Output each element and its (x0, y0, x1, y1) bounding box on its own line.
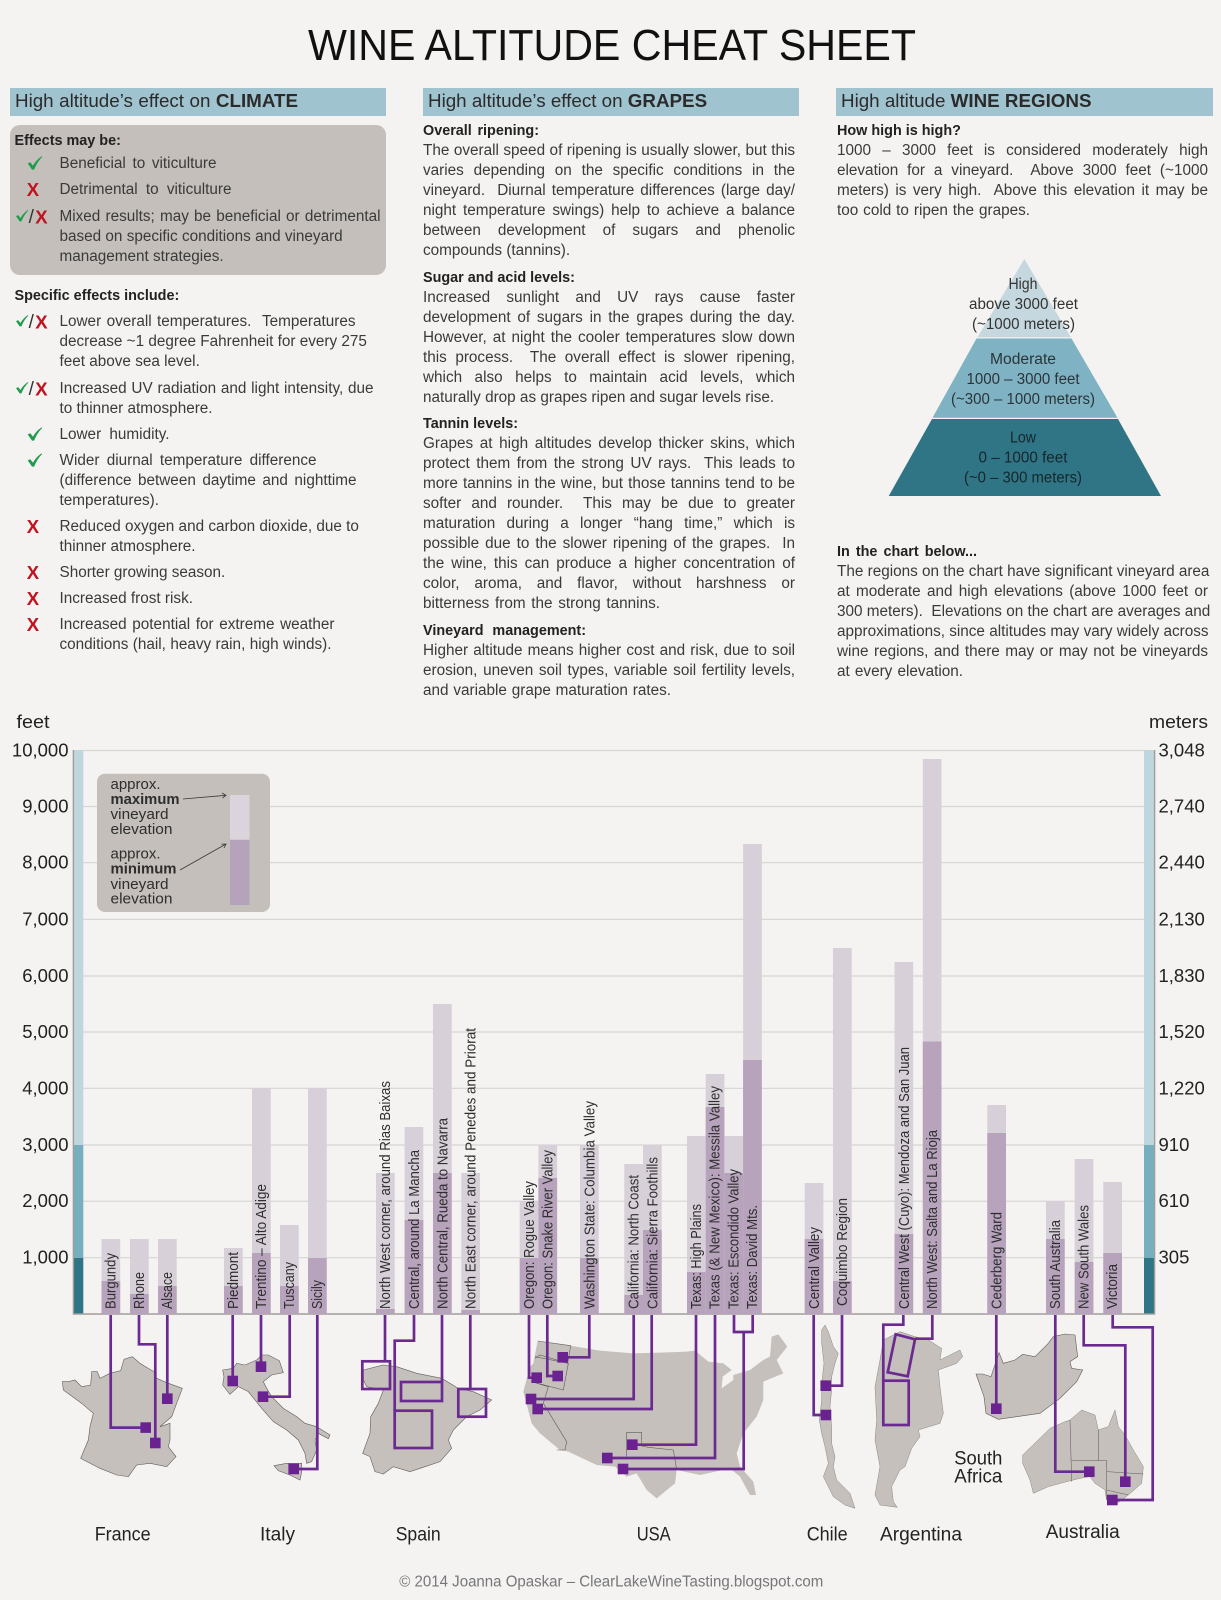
text block: overall ripening: Overall ripening: (423, 123, 539, 139)
y axis: meters: 2,740 (1158, 796, 1205, 816)
map: Argentina (875, 1332, 963, 1507)
bars: Argentina: North West: Salta and La Rioja (925, 1129, 941, 1309)
text block: sugar and acid levels (423, 270, 795, 406)
country labels: Australia (1046, 1522, 1120, 1543)
panel: climate (10, 88, 386, 653)
effect: lower humidity: Lower humidity. (60, 426, 170, 443)
y axis: feet: feet (16, 711, 50, 732)
legend: elevation (110, 892, 172, 908)
y axis: meters: 610 (1158, 1190, 1189, 1211)
map: Australia (1023, 1410, 1143, 1505)
text block: tannin levels: maturation during a longer “hang time,” which is (423, 515, 795, 532)
effect: shorter season: X (27, 562, 40, 583)
bars: Spain: Central, around La Mancha (407, 1149, 423, 1309)
map: USA (523, 1334, 787, 1498)
key: detrimental: X (27, 179, 40, 200)
connectors: Chile (814, 1315, 842, 1420)
footer credit: © 2014 Joanna Opaskar – ClearLakeWineTasting.blogspot.com (399, 1574, 823, 1591)
text block: vineyard management: Vineyard management: (423, 623, 586, 639)
pyramid tier: low: Low (1010, 430, 1037, 447)
bars: USA: Texas: High Plains (689, 1204, 705, 1309)
key: detrimental: Detrimental to viticulture (60, 181, 232, 198)
map: Spain (363, 1365, 492, 1474)
connectors: Italy (227, 1315, 317, 1474)
text block: tannin levels: softer and rounder. This may be due to greater (423, 495, 795, 512)
y axis: feet: 8,000 (22, 852, 68, 873)
effect: frost risk (27, 588, 193, 609)
pyramid tier: low (889, 419, 1161, 496)
legend: vineyard (110, 807, 168, 823)
text block: vineyard management: Higher altitude means higher cost and risk, due to soil (423, 642, 795, 659)
connectors: Argentina (883, 1315, 932, 1425)
effect: shorter season (27, 562, 225, 583)
country labels: USA (637, 1525, 671, 1546)
pyramid tier: low: 0 – 1000 feet (978, 450, 1068, 467)
bars: USA: Oregon: Snake River Valley (541, 1149, 557, 1309)
bars: Spain (376, 1004, 480, 1314)
y axis: meters: 1,520 (1158, 1021, 1205, 1042)
bars: Chile: Central Valley (807, 1226, 823, 1309)
text block: sugar and acid levels: However, at night the cooler temperatures slow down (423, 329, 795, 346)
text block: overall ripening: varies depending on the specific conditions in the (423, 162, 795, 179)
bars: France: Alsace (160, 1272, 176, 1309)
connector: Cederberg (991, 1315, 1002, 1414)
bars: USA: Texas: Escondido Valley (726, 1168, 742, 1309)
text block: how high is high: too cold to ripen the grapes. (837, 202, 1030, 219)
text block: in the chart below: wine regions, and there may or may not be vineyards (837, 643, 1208, 660)
y axis: feet: 1,000 (22, 1247, 68, 1268)
effect: diurnal difference (28, 452, 356, 509)
pyramid tier: high: High (1008, 276, 1038, 293)
bars: South Africa: Cederberg Ward (989, 1212, 1005, 1309)
effect: lower temperatures: decrease ~1 degree Fahrenheit for every 275 (60, 333, 367, 350)
text block: how high is high: 1000 – 3000 feet is considered moderately high (837, 142, 1208, 159)
map: Italy (223, 1355, 330, 1480)
connectors: Spain (362, 1315, 486, 1448)
text block: how high is high (837, 123, 1208, 219)
y axis: meters: 2,440 (1158, 852, 1205, 873)
effect: UV radiation: / (29, 378, 35, 400)
bars: Italy: Piedmont (226, 1252, 242, 1309)
legend: approx. (110, 847, 160, 863)
bars: Australia: South Australia (1048, 1219, 1064, 1309)
effect: UV radiation: X (35, 378, 48, 399)
text block: overall ripening: night temperature swings) help to achieve a balance (423, 202, 795, 219)
text block: vineyard management: erosion, uneven soil types, variable soil fertility levels, (423, 662, 795, 679)
pyramid tier: moderate: (~300 – 1000 meters) (951, 391, 1095, 408)
effect: UV radiation (16, 378, 374, 417)
text block: tannin levels: bitterness from the strong tannins. (423, 595, 660, 612)
effect: diurnal difference: Wider diurnal temperature difference (60, 452, 316, 469)
effects key heading: Effects may be: (14, 133, 121, 149)
bars: Argentina: Central West (Cuyo): Mendoza and San Juan (897, 1047, 913, 1309)
text block: in the chart below: at every elevation. (837, 663, 963, 680)
text block: how high is high: meters) is very high. Above this elevation it may be (837, 182, 1208, 199)
effect: reduced oxygen: thinner atmosphere. (60, 538, 196, 555)
bars: USA: Texas: David Mts. (745, 1205, 761, 1309)
bars: Italy: Trentino – Alto Adige (254, 1184, 270, 1309)
country labels: Italy (260, 1525, 295, 1546)
pyramid tier: high: (~1000 meters) (972, 316, 1075, 333)
y axis: feet: 10,000 (12, 740, 68, 760)
effect: frost risk: X (27, 588, 40, 609)
effect: diurnal difference: temperatures). (60, 492, 159, 509)
map: France (62, 1357, 182, 1477)
y axis: meters (1149, 711, 1208, 1268)
text block: sugar and acid levels: this process. The overall effect is slower ripening, (423, 349, 795, 366)
text block: in the chart below (837, 544, 1210, 680)
text block: sugar and acid levels: naturally drop as grapes ripen and sugar levels rise. (423, 389, 774, 406)
text block: tannin levels: protect them from the strong UV rays. This leads to (423, 455, 795, 472)
text block: how high is high: elevation for a vineyard. Above 3000 feet (~1000 (837, 162, 1208, 179)
bars: South Africa (987, 1105, 1006, 1314)
connectors: Australia (1055, 1315, 1153, 1505)
heading: grapes (423, 88, 799, 116)
bars: Spain: North East corner, around Penedes and Priorat (464, 1028, 480, 1309)
text block: vineyard management: and variable grape maturation rates. (423, 682, 671, 699)
bars: France (102, 1239, 177, 1314)
panel: wine regions (836, 88, 1213, 680)
effect: reduced oxygen (27, 516, 359, 555)
text block: sugar and acid levels: Sugar and acid levels: (423, 270, 575, 286)
heading: grapes: High altitude’s effect on GRAPES (428, 90, 707, 111)
legend: vineyard (110, 877, 168, 893)
effect: extreme weather: Increased potential for extreme weather (60, 616, 334, 633)
axis lines (73, 750, 1155, 1314)
key: mixed: / (29, 206, 35, 228)
bars: Italy: Tuscany (282, 1261, 298, 1309)
y axis: meters: 1,830 (1158, 965, 1205, 986)
connectors: France (111, 1315, 173, 1448)
pyramid tier: low: (~0 – 300 meters) (964, 470, 1082, 487)
text block: sugar and acid levels: Increased sunlight and UV rays cause faster (423, 289, 795, 306)
text block: overall ripening: vineyard. Diurnal temperature differences (large day/ (423, 182, 795, 199)
y axis: feet: 5,000 (22, 1021, 68, 1042)
text block: tannin levels: Tannin levels: (423, 416, 518, 432)
map: South Africa (976, 1334, 1083, 1419)
bars: Australia: New South Wales (1077, 1205, 1093, 1309)
bars: Australia (1046, 1159, 1122, 1314)
key: detrimental (27, 179, 232, 200)
country labels: Chile (807, 1525, 848, 1546)
text block: tannin levels: Grapes at high altitudes develop thicker skins, which (423, 435, 795, 452)
heading: climate (10, 88, 386, 116)
text block: tannin levels: color, aroma, and flavor, without harshness or (423, 575, 795, 592)
pyramid tier: high (969, 259, 1079, 337)
specific effects heading: Specific effects include: (14, 288, 179, 304)
effect: extreme weather: X (27, 614, 40, 635)
bars: Spain: North West corner, around Rias Baixas (378, 1081, 394, 1309)
key: mixed: based on specific conditions and vineyard (60, 228, 343, 245)
bars: France: Burgundy (103, 1252, 119, 1309)
country labels: Africa (954, 1467, 1003, 1488)
title: WINE ALTITUDE CHEAT SHEET (308, 21, 916, 70)
callout: effects key (10, 125, 386, 275)
y axis: feet: 6,000 (22, 965, 68, 986)
legend: approx. (110, 777, 160, 793)
effect: diurnal difference: (difference between daytime and nighttime (60, 472, 356, 489)
y axis: feet: 9,000 (22, 796, 68, 816)
chart: vineyard elevation by region (12, 711, 1208, 1314)
effect: UV radiation: Increased UV radiation and light intensity, due (60, 380, 374, 397)
effect: lower temperatures (16, 311, 367, 370)
y axis: meters: 910 (1158, 1134, 1189, 1155)
bars: USA (520, 844, 762, 1314)
effect: extreme weather: conditions (hail, heavy rain, high winds). (60, 636, 332, 653)
effect: lower temperatures: X (35, 311, 48, 332)
text block: tannin levels: possible due to the slower ripening of the grapes. In (423, 535, 795, 552)
text block: overall ripening: compounds (tannins). (423, 242, 570, 259)
bars: Chile: Coquimbo Region (835, 1198, 851, 1306)
effect: reduced oxygen: Reduced oxygen and carbon dioxide, due to (60, 518, 359, 535)
heading: wine regions (836, 88, 1213, 116)
y axis: meters: 305 (1158, 1247, 1189, 1268)
bars: Argentina (894, 759, 942, 1314)
bars: Italy (224, 1088, 327, 1314)
effect: lower temperatures: feet above sea level. (60, 353, 200, 370)
text block: tannin levels: more tannins in the wine, but those tannins tend to be (423, 475, 795, 492)
country labels: South (954, 1448, 1002, 1469)
key: beneficial: Beneficial to viticulture (60, 155, 216, 172)
effect: UV radiation: to thinner atmosphere. (60, 400, 213, 417)
text block: overall ripening (423, 123, 795, 259)
bars: Chile (805, 948, 852, 1314)
left altitude scale band (74, 750, 83, 1314)
bars: USA: Washington State: Columbia Valley (582, 1100, 598, 1309)
country labels: Spain (396, 1525, 441, 1546)
country labels: France (95, 1525, 151, 1546)
bars: USA: Texas (& New Mexico): Messila Valley (708, 1085, 724, 1309)
bars: USA: California: Sierra Foothills (645, 1157, 661, 1309)
heading: climate: High altitude’s effect on CLIMATE (15, 90, 298, 111)
effect: lower temperatures: Lower overall temperatures. Temperatures (60, 313, 356, 330)
pyramid tier: moderate: 1000 – 3000 feet (966, 371, 1080, 388)
effect: reduced oxygen: X (27, 516, 40, 537)
text block: overall ripening: between development of sugars and phenolic (423, 222, 795, 239)
effect: extreme weather (27, 614, 334, 653)
effect: shorter season: Shorter growing season. (60, 564, 225, 581)
key: mixed: management strategies. (60, 248, 224, 265)
effect: frost risk: Increased frost risk. (60, 590, 193, 607)
text block: in the chart below: The regions on the chart have significant vineyard area (837, 563, 1209, 580)
text block: in the chart below: approximations, since altitudes may vary widely across (837, 623, 1209, 640)
text block: in the chart below: at moderate and high elevations (above 1000 feet or (837, 583, 1208, 600)
text block: in the chart below: In the chart below... (837, 544, 977, 560)
effect: lower temperatures: / (29, 312, 35, 333)
map: Chile (819, 1325, 855, 1508)
bars: Italy: Sicily (310, 1279, 326, 1309)
y axis: feet (12, 711, 68, 1268)
bars: Spain: North Central, Rueda to Navarra (435, 1117, 451, 1309)
legend: maximum (110, 792, 180, 808)
country labels: Argentina (880, 1525, 962, 1546)
heading: wine regions: High altitude WINE REGIONS (841, 90, 1092, 111)
pyramid tier: high: above 3000 feet (969, 296, 1079, 313)
pyramid tier: moderate: Moderate (990, 351, 1056, 368)
text block: sugar and acid levels: which also helps to maintain acid levels, which (423, 369, 795, 386)
pyramid: elevation levels (889, 259, 1161, 496)
text block: overall ripening: The overall speed of ripening is usually slower, but this (423, 142, 795, 159)
right altitude scale band (1144, 750, 1154, 1314)
text block: sugar and acid levels: development of sugars in the grapes during the day. (423, 309, 795, 326)
y axis: feet: 4,000 (22, 1077, 68, 1098)
y axis: feet: 2,000 (22, 1190, 68, 1211)
text block: tannin levels: the wine, this can produce a higher concentration of (423, 555, 795, 572)
text block: tannin levels (423, 416, 796, 612)
pyramid tier: moderate (932, 338, 1118, 418)
legend: minimum (110, 862, 176, 878)
bars: France: Rhone (132, 1272, 148, 1309)
bars: USA: California: North Coast (627, 1175, 643, 1309)
key: mixed: X (35, 206, 48, 227)
key: mixed: Mixed results; may be beneficial or detrimental (60, 208, 380, 225)
bars: USA: Oregon: Rogue Valley (522, 1180, 538, 1309)
key: mixed (16, 206, 380, 265)
text block: how high is high: How high is high? (837, 123, 961, 139)
y axis: meters: 2,130 (1158, 908, 1205, 929)
text block: in the chart below: 300 meters). Elevations on the chart are averages and (837, 603, 1210, 620)
y axis: feet: 7,000 (22, 908, 68, 929)
y axis: meters: 1,220 (1158, 1077, 1205, 1098)
y axis: meters: 3,048 (1158, 740, 1205, 760)
legend (97, 774, 270, 912)
bars: Australia: Victoria (1105, 1263, 1121, 1309)
text block: vineyard management (423, 623, 795, 699)
y axis: feet: 3,000 (22, 1134, 68, 1155)
y axis: meters: meters (1149, 711, 1208, 732)
legend: elevation (110, 822, 172, 838)
connectors: USA (526, 1315, 753, 1474)
panel: grapes (423, 88, 799, 699)
country labels (95, 1448, 1120, 1546)
